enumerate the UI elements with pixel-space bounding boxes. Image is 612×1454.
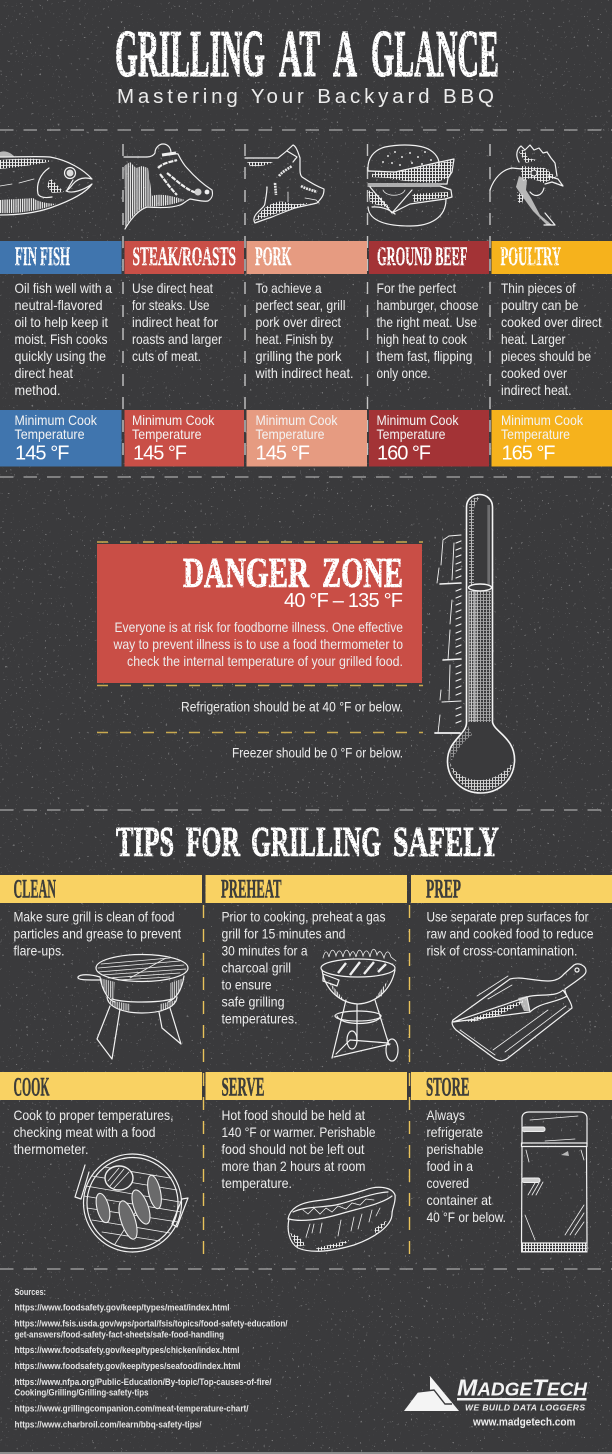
heading bar: preheat: PREHEAT (221, 874, 282, 904)
text: store: Always (426, 1108, 465, 1123)
temperature: steak: 145 °F (133, 442, 187, 464)
text: pork tip: perfect sear, grill (256, 298, 346, 313)
temperature: ground beef: Minimum Cook (376, 413, 459, 428)
temperature: steak: Temperature (132, 427, 202, 442)
text: ground beef tip (376, 281, 479, 381)
text: pork tip: To achieve a (256, 281, 322, 296)
text: serve: food should not be left out (222, 1142, 365, 1157)
text: fin fish tip: oil to help keep it (14, 315, 108, 330)
text: store: container at (426, 1193, 492, 1208)
text: preheat: grill for 15 minutes and (222, 926, 346, 942)
text: steak tip: roasts and larger (132, 332, 222, 347)
panel: cook (0, 1072, 202, 1252)
temperature: ground beef: Temperature (376, 427, 446, 442)
panel: poultry (490, 145, 612, 466)
sources list: https://www.foodsafety.gov/keep/types/meat/index.html (14, 1302, 230, 1312)
panel: ground beef (368, 145, 489, 467)
heading bar: clean (0, 874, 202, 904)
text: store: perishable (426, 1142, 484, 1157)
heading bar: preheat (206, 874, 407, 904)
text: fin fish tip: neutral-flavored (14, 298, 102, 313)
text: pork tip: grilling the pork (256, 349, 342, 364)
logo: MadgeTech: MADGETECH (457, 1374, 588, 1400)
panel: pork (245, 145, 367, 466)
sources list: get-answers/food-safety-fact-sheets/safe-food-handling (14, 1330, 224, 1340)
text: steak tip (132, 281, 222, 364)
text: pork tip (255, 281, 354, 381)
text: fin fish tip: moist. Fish cooks (14, 332, 108, 347)
logo: MadgeTech: www.madgetech.com (472, 1416, 576, 1428)
text: ground beef tip: them fast, flipping (376, 349, 472, 364)
heading bar: steak and roasts (124, 241, 244, 274)
icon: thermometer (435, 494, 515, 793)
icon: grill with sausages (75, 1154, 188, 1252)
panel: preheat (206, 874, 407, 1061)
text: fin fish tip: quickly using the (14, 349, 106, 364)
heading bar: store: STORE (426, 1072, 470, 1102)
temperature: ground beef: 160 °F (377, 442, 431, 464)
refrigeration note: Refrigeration should be at 40 °F or below. (181, 700, 403, 714)
heading bar: cook (0, 1072, 202, 1102)
text: store: food in a (426, 1159, 473, 1174)
text: fin fish tip: direct heat (14, 366, 73, 381)
title: GRILLING (115, 17, 265, 91)
heading bar: fin fish: FIN FISH (15, 242, 70, 271)
text: store: refrigerate (426, 1125, 483, 1140)
temperature: fin fish (0, 410, 122, 466)
text: serve: Hot food should be held at (222, 1108, 365, 1123)
text: clean (14, 910, 181, 958)
text: poultry tip: pieces should be (501, 349, 591, 364)
heading bar: cook: COOK (14, 1072, 50, 1102)
text: serve (222, 1108, 376, 1191)
text: steak tip: for steaks. Use (132, 298, 210, 313)
text: steak tip: indirect heat for (132, 315, 218, 330)
text: poultry tip: cooked over direct (501, 315, 602, 330)
icon: burger (368, 145, 454, 226)
text: preheat: temperatures. (222, 1012, 298, 1026)
icon: round table grill (78, 954, 188, 1059)
icon: kettle grill (321, 949, 398, 1061)
sources list (14, 1287, 288, 1430)
sources list: Sources: (14, 1287, 46, 1297)
temperature: fin fish: Minimum Cook (14, 413, 97, 428)
panel: clean (0, 874, 202, 1059)
panel: steak and roasts (124, 144, 244, 466)
text: store: 40 °F or below. (426, 1210, 506, 1225)
icon: refrigerator (522, 1112, 587, 1252)
text: poultry tip: indirect heat. (501, 383, 572, 398)
text: clean: particles and grease to prevent (14, 926, 181, 942)
text: poultry tip: Thin pieces of (501, 281, 576, 296)
temperature: pork: 145 °F (256, 442, 310, 464)
text: ground beef tip: only once. (376, 366, 430, 381)
heading bar: pork (246, 241, 367, 274)
section heading: tips (116, 820, 499, 866)
text: ground beef tip: For the perfect (376, 281, 456, 296)
temperature: poultry: Minimum Cook (501, 413, 583, 428)
text: preheat: to ensure (222, 978, 272, 992)
text: store (426, 1108, 506, 1225)
danger zone heading: ZONE (322, 551, 403, 597)
text: cook: Cook to proper temperatures, (14, 1108, 174, 1123)
sources list: Cooking/Grilling/Grilling-safety-tips (14, 1388, 149, 1398)
sources list: https://www.foodsafety.gov/keep/types/seafood/index.html (14, 1361, 240, 1371)
text: prep: Use separate prep surfaces for (426, 910, 589, 924)
panel: store (411, 1072, 612, 1252)
panel: fin fish (0, 151, 122, 466)
text: fin fish tip: Oil fish well with a (14, 281, 112, 296)
logo: MadgeTech (404, 1374, 588, 1428)
text: poultry tip: heat. Larger (501, 332, 566, 347)
sources list: https://www.charbroil.com/learn/bbq-safety-tips/ (14, 1420, 202, 1430)
temperature: poultry (492, 410, 612, 466)
danger zone temperature range: 40 °F – 135 °F (284, 590, 403, 612)
icon: pig (245, 145, 324, 223)
panel: prep (411, 874, 612, 1061)
temperature: steak (124, 410, 244, 466)
text: preheat (222, 910, 386, 1026)
text: prep: raw and cooked food to reduce (426, 926, 594, 942)
danger zone heading: DANGER (183, 551, 309, 597)
text: store: covered (426, 1176, 469, 1191)
logo: MadgeTech: WE BUILD DATA LOGGERS (465, 1402, 585, 1412)
section heading: tips: GRILLING (251, 820, 381, 866)
temperature: pork: Temperature (256, 427, 325, 442)
text: cook (14, 1108, 174, 1157)
text: clean: Make sure grill is clean of food (14, 910, 174, 924)
text: pork tip: with indirect heat. (255, 366, 354, 381)
text: preheat: 30 minutes for a (222, 944, 308, 958)
text: poultry tip (501, 281, 602, 398)
subtitle: Mastering Your Backyard BBQ (117, 85, 494, 108)
heading bar: clean: CLEAN (14, 874, 56, 904)
heading bar: serve (206, 1072, 407, 1102)
text: preheat: safe grilling (222, 994, 284, 1010)
danger zone description: Everyone is at risk for foodborne illness. One effective (114, 620, 403, 635)
icon: hot dog (288, 1187, 395, 1251)
heading bar: ground beef (369, 241, 489, 274)
heading bar: steak and roasts: STEAK/ROASTS (132, 242, 236, 271)
sources list: https://www.fsis.usda.gov/wps/portal/fsis/topics/food-safety-education/ (14, 1318, 288, 1328)
text: pork tip: heat. Finish by (256, 332, 333, 347)
text: prep: risk of cross-contamination. (426, 944, 578, 958)
danger zone description: check the internal temperature of your grilled food. (127, 654, 403, 669)
text: serve: temperature. (222, 1176, 292, 1191)
temperature: fin fish: Temperature (14, 427, 85, 442)
sources list: https://www.nfpa.org/Public-Education/By-topic/Top-causes-of-fire/ (14, 1377, 272, 1387)
text: fin fish tip (14, 281, 112, 398)
heading bar: prep: PREP (426, 874, 461, 904)
text: ground beef tip: hamburger, choose (376, 298, 479, 313)
heading bar: store (411, 1072, 612, 1102)
heading bar: ground beef: GROUND BEEF (377, 242, 468, 271)
sources list: https://www.foodsafety.gov/keep/types/chicken/index.html (14, 1345, 240, 1355)
danger zone description: way to prevent illness is to use a food thermometer to (113, 637, 403, 652)
text: poultry tip: cooked over (501, 366, 567, 381)
panel: serve (206, 1072, 407, 1251)
text: serve: 140 °F or warmer. Perishable (222, 1125, 376, 1140)
temperature: poultry: 165 °F (502, 442, 556, 464)
panel: danger zone (97, 544, 422, 683)
sources list: https://www.grillingcompanion.com/meat-temperature-chart/ (14, 1404, 249, 1414)
text: fin fish tip: method. (14, 383, 60, 398)
section heading: tips: SAFELY (393, 820, 499, 866)
text: pork tip: pork over direct (256, 315, 341, 330)
text: steak tip: cuts of meat. (132, 349, 201, 364)
heading bar: serve: SERVE (222, 1072, 264, 1102)
section heading: tips: FOR (186, 820, 240, 866)
temperature: pork (246, 410, 367, 466)
text: cook: checking meat with a food (14, 1125, 156, 1140)
temperature: poultry: Temperature (501, 427, 570, 442)
temperature: ground beef (369, 410, 489, 466)
temperature: pork: Minimum Cook (256, 413, 338, 428)
text: ground beef tip: high heat to cook (376, 332, 467, 347)
icon: fish (0, 151, 92, 215)
temperature: steak: Minimum Cook (132, 413, 215, 428)
text: ground beef tip: the right meat. Use (376, 315, 477, 330)
text: serve: more than 2 hours at room (222, 1159, 366, 1174)
text: cook: thermometer. (14, 1142, 88, 1157)
text: preheat: Prior to cooking, preheat a gas (222, 910, 386, 924)
text: poultry tip: poultry can be (501, 298, 579, 313)
heading bar: pork: PORK (255, 242, 292, 271)
icon: logo triangle (404, 1376, 459, 1411)
text: steak tip: Use direct heat (132, 281, 213, 296)
title: A (333, 17, 357, 91)
title: AT (279, 17, 320, 91)
icon: cow (124, 144, 213, 229)
text: preheat: charcoal grill (222, 960, 291, 976)
temperature: fin fish: 145 °F (15, 442, 70, 464)
icon: rooster (490, 145, 563, 225)
icon: cutting board and knife (452, 964, 586, 1061)
danger zone description (113, 620, 403, 669)
text: clean: flare-ups. (14, 944, 64, 958)
freezer note: Freezer should be 0 °F or below. (232, 746, 403, 760)
heading bar: prep (411, 874, 612, 904)
section heading: tips: TIPS (116, 820, 174, 866)
text: prep (426, 910, 594, 958)
